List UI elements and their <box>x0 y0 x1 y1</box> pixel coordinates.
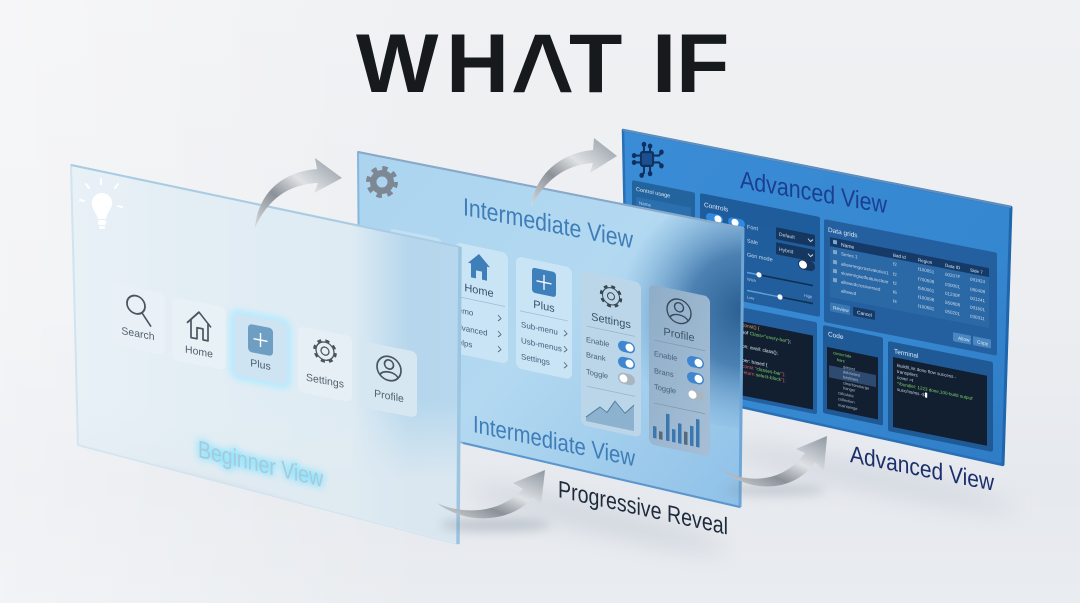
card: plus: Plus <box>533 299 555 315</box>
table: 550808 <box>945 300 960 308</box>
table: f2 <box>893 261 897 267</box>
table: f4 <box>893 298 897 304</box>
card: profile: Enable <box>654 349 677 363</box>
table: f100098 <box>918 294 935 303</box>
table: Data ID <box>945 263 961 271</box>
table: f2 <box>893 280 897 286</box>
icon: circuit chip <box>632 142 664 178</box>
table: 091924 <box>970 277 985 284</box>
chart: area <box>586 395 634 431</box>
sub-panel: control usage <box>632 180 695 283</box>
card: profile: Profile <box>663 326 695 345</box>
sub-panel: code tree: hanger <box>843 385 856 393</box>
sub-panel: code tree: maintainge <box>838 402 858 411</box>
card: plus: Sub-menu <box>521 320 558 337</box>
card: settings: Enable <box>586 335 609 349</box>
table: 080408 <box>970 287 985 294</box>
sub-panel: controls: Font <box>747 224 758 233</box>
table: Series 1 <box>841 251 858 260</box>
table: Side 7 <box>970 268 983 275</box>
title: WHAT IF <box>356 17 729 111</box>
card: plus (glowing) <box>230 308 291 390</box>
card: home: Helps <box>452 336 472 350</box>
panel shadows <box>471 437 1019 559</box>
chart: bars <box>653 410 700 448</box>
arrow: bottom to intermediate <box>437 470 545 518</box>
sub-panel: code tree <box>823 325 883 426</box>
buttons: Allow <box>958 336 970 344</box>
card: home: Advanced <box>452 321 488 338</box>
sub-panel: code editor: return select-block"); <box>742 369 786 384</box>
label: advanced view: Advanced View <box>850 441 994 497</box>
sub-panel: data grids <box>824 219 997 356</box>
sub-panel: controls: Controls <box>704 202 729 214</box>
table: Bad id <box>893 252 906 260</box>
heading: intermediate view: Intermediate View <box>463 193 634 254</box>
card: home: Demo <box>452 304 474 318</box>
buttons <box>830 302 991 349</box>
label: progressive reveal: Progressive Reveal <box>558 476 728 541</box>
table: Region <box>918 257 933 265</box>
label: beginner view: Beginner View <box>198 436 323 493</box>
card: settings: Brank <box>586 350 606 363</box>
card: profile: Brans <box>654 366 674 379</box>
table: f700598 <box>918 276 935 285</box>
table: 00207F <box>945 272 960 280</box>
card: settings: Settings <box>591 311 631 332</box>
arrow: intermediate to advanced <box>531 138 617 207</box>
sub-panel: code tree: collection <box>838 396 855 405</box>
card: home <box>172 297 226 370</box>
sub-panel: code editor <box>630 285 817 414</box>
heading: advanced view: Advanced View <box>740 166 888 219</box>
sub-panel: controls: High <box>804 293 812 299</box>
sub-panel: terminal: transpilers <box>897 369 918 378</box>
card: settings <box>298 326 352 402</box>
card: profile: Toggle <box>654 382 676 396</box>
sub-panel: terminal: Build/Lint done flow success - <box>897 363 957 380</box>
panel: beginner view <box>71 165 460 544</box>
card: search: Search <box>121 325 155 343</box>
card: profile <box>649 284 710 457</box>
sub-panel: controls: Low <box>747 294 754 301</box>
sub-panel: code editor: const "classes-bar"); <box>742 363 786 378</box>
table: Name <box>841 242 854 251</box>
card: home <box>452 241 508 364</box>
sub-panel: code tree: calculate <box>838 390 854 399</box>
table: allowmngcrossvalories1 <box>841 261 889 276</box>
table: f550061 <box>918 285 935 294</box>
table: f2 <box>893 271 897 277</box>
table: slowmngsetfeatureclear <box>841 270 889 285</box>
sub-panel: controls: Sale <box>747 238 758 247</box>
icon: gear <box>368 168 396 196</box>
card: home: Home <box>464 282 494 300</box>
sub-panel: code editor: on: avail: class(); <box>742 343 778 357</box>
card: search <box>111 283 165 355</box>
table: allowedcrossversed <box>841 279 881 292</box>
sub-panel: terminal: ^/bundle/: 1223 done,100-build output' <box>897 381 973 401</box>
buttons: Cancel <box>857 310 872 319</box>
sub-panel: code tree: conscrode <box>833 350 852 359</box>
card: plus <box>516 256 572 380</box>
card: settings: Toggle <box>586 367 608 381</box>
table: 091501 <box>970 305 985 312</box>
panel: advanced view <box>623 130 1011 465</box>
sub-panel: terminal: succ/ns/ms -$ <box>897 387 925 397</box>
sub-panel: code tree: deletetest <box>843 369 861 378</box>
card: settings <box>581 270 641 438</box>
sub-panel: code tree: bars <box>837 357 845 364</box>
arrow: bottom to advanced <box>720 436 827 487</box>
card: settings: Settings <box>306 372 344 391</box>
card: hidden tab <box>388 228 443 279</box>
label: beginner view: Beginner View <box>198 436 323 493</box>
card: profile <box>360 341 417 418</box>
buttons: Review <box>833 305 849 314</box>
table <box>830 237 989 328</box>
table: 030001 <box>945 282 960 290</box>
table: f6 <box>893 289 897 295</box>
table: 030311 <box>970 314 985 321</box>
sub-panel: control usage: Control usage <box>636 187 670 200</box>
arrow: beginner to intermediate <box>255 158 342 228</box>
sub-panel: terminal <box>888 341 993 452</box>
table: allowed <box>841 288 857 296</box>
arrow shadows <box>440 484 825 532</box>
card: plus (glowing): Plus <box>250 357 271 373</box>
sub-panel: terminal: Terminal <box>894 348 919 360</box>
sub-panel: controls: Wish <box>747 276 756 283</box>
sub-panel: code tree: Code <box>828 331 844 341</box>
table: f100581 <box>918 303 935 312</box>
sub-panel: code editor: const() { <box>742 322 760 332</box>
table: 050201 <box>945 309 960 317</box>
table: f100051 <box>918 266 935 275</box>
table: 01230F <box>945 291 960 299</box>
table: 001241 <box>970 296 985 303</box>
sub-panel: code editor: sof Class="every-bar"); <box>742 329 791 345</box>
panel: intermediate view <box>357 151 744 508</box>
sub-panel: code tree: bestbars <box>843 374 858 382</box>
sub-panel: data grids: Data grids <box>828 227 858 240</box>
buttons: Copy <box>977 339 989 348</box>
sub-panel: controls: Gen mode <box>747 252 773 264</box>
sub-panel: control usage: Name <box>639 200 651 208</box>
label: intermediate view: Intermediate View <box>473 411 635 472</box>
sub-panel: controls: Hybrid <box>779 247 794 256</box>
sub-panel: code tree: dettest <box>843 364 856 372</box>
sub-panel: controls: Default <box>779 232 795 241</box>
sub-panel: code editor: per: based { <box>742 357 768 369</box>
sub-panel: code tree: clearbaselarge <box>843 380 870 391</box>
card: home: Home <box>185 344 213 361</box>
card: profile: Profile <box>374 388 404 405</box>
sub-panel: controls <box>700 193 820 317</box>
card: plus: Usb-menus <box>521 336 562 354</box>
card: plus: Settings <box>521 352 550 367</box>
sub-panel: terminal: cover =t <box>897 375 914 383</box>
icon: light bulb <box>80 179 122 229</box>
